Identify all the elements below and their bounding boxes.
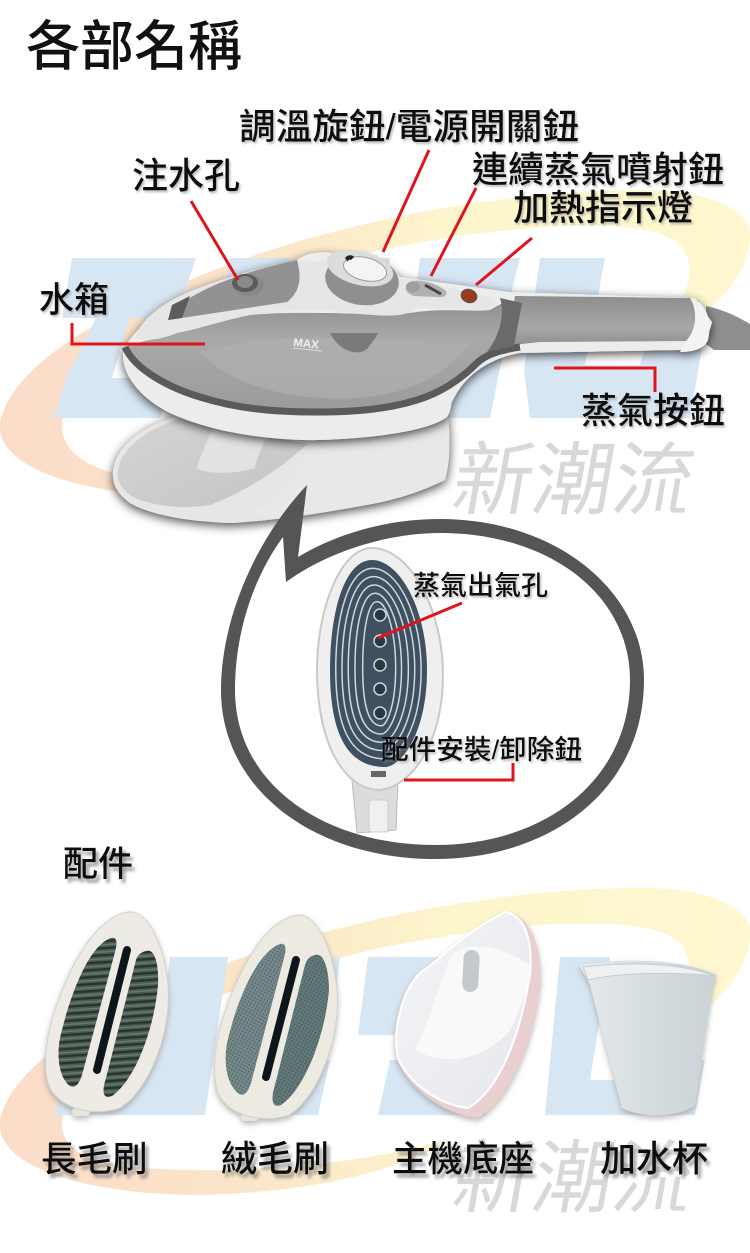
label: 加水杯: 加水杯	[600, 1138, 708, 1179]
stand base	[113, 415, 449, 523]
accessory: main unit base	[395, 912, 541, 1118]
steam holes	[374, 609, 386, 719]
watermark: bottom brand text: 新潮流	[446, 1135, 702, 1224]
accessory: long bristle brush	[46, 912, 168, 1116]
release latch	[371, 771, 386, 777]
steam lock button	[406, 281, 447, 297]
temperature dial	[322, 243, 402, 310]
label: 蒸氣按鈕: 蒸氣按鈕	[581, 390, 725, 431]
tank inner detail	[200, 338, 470, 399]
iron soleplate close-up	[317, 548, 443, 833]
callout lines	[72, 150, 655, 780]
max mark: MAX	[293, 337, 320, 352]
label: 連續蒸氣噴射鈕: 連續蒸氣噴射鈕	[472, 149, 724, 190]
soleplate	[330, 560, 427, 767]
label: 注水孔: 注水孔	[132, 155, 240, 196]
watermark: top brand text: 新潮流	[446, 437, 702, 526]
watermark: bottom logo	[0, 888, 750, 1195]
label: 加熱指示燈: 加熱指示燈	[513, 187, 693, 228]
label: 主機底座: 主機底座	[392, 1139, 534, 1179]
accessory: velvet brush	[215, 915, 337, 1121]
power cord	[706, 306, 750, 350]
magnifier bubble	[221, 485, 644, 859]
heading: 配件: 配件	[63, 845, 133, 884]
title: 各部名稱	[26, 17, 242, 77]
watermark: top logo	[0, 190, 750, 497]
label: 長毛刷: 長毛刷	[41, 1139, 148, 1179]
soleplate grooves	[336, 568, 421, 759]
label: 蒸氣出氣孔: 蒸氣出氣孔	[413, 571, 548, 601]
accessory: measuring cup	[579, 961, 717, 1115]
water fill button	[232, 274, 264, 296]
label: 配件安裝/卸除鈕: 配件安裝/卸除鈕	[381, 735, 582, 765]
label: 調溫旋鈕/電源開關鈕: 調溫旋鈕/電源開關鈕	[239, 106, 579, 147]
label: 水箱: 水箱	[39, 281, 109, 320]
outer shell	[317, 548, 443, 790]
product: steam iron on stand	[113, 243, 750, 523]
iron body	[123, 252, 712, 440]
neck	[352, 780, 398, 833]
label: 絨毛刷: 絨毛刷	[221, 1138, 329, 1179]
heating indicator lamp	[459, 287, 479, 305]
